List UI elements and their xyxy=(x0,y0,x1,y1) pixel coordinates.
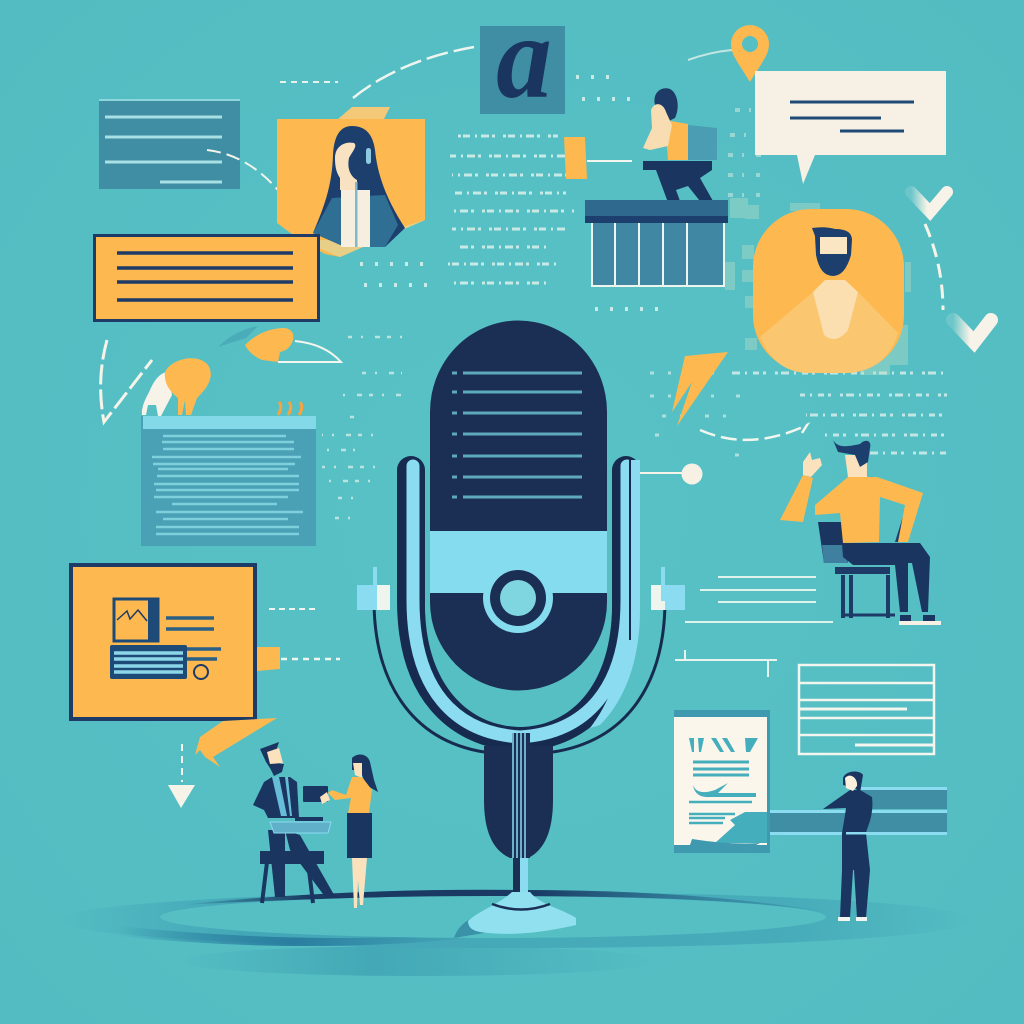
mic: outer thin arcs xyxy=(374,600,665,752)
yellow blob and arc xyxy=(218,326,341,362)
arc to pin xyxy=(688,50,732,60)
arrow: dashed down xyxy=(168,744,195,808)
document illustration xyxy=(674,710,770,853)
faint text texture: upper centre xyxy=(448,136,574,283)
faint text texture: upper right xyxy=(728,110,770,195)
floor shadow ellipse xyxy=(59,890,975,976)
lightning shape xyxy=(672,352,728,426)
figure: standing person on phone xyxy=(823,772,872,921)
check mark lower xyxy=(953,320,991,342)
mic: head body xyxy=(430,320,607,532)
note connector xyxy=(587,160,632,162)
small orange note xyxy=(564,137,587,179)
mic: right clamp xyxy=(651,567,685,610)
panel: browser text block xyxy=(141,402,316,546)
mic: cradle light band xyxy=(413,466,627,737)
mic: left clamp xyxy=(357,567,390,610)
dashed arc right xyxy=(700,425,807,440)
mic: grille lines xyxy=(463,373,582,497)
figure: woman with long hair xyxy=(313,126,405,247)
microphone xyxy=(357,320,685,934)
connector from chart card xyxy=(257,609,340,671)
figure: person seated on building xyxy=(643,88,722,220)
figure: standing businesswoman xyxy=(303,755,378,908)
building / columns xyxy=(585,200,728,287)
dashed tick line xyxy=(675,650,777,677)
faint text texture: left of microphone xyxy=(322,337,412,518)
mic: stem xyxy=(484,746,553,858)
speech bubble top right xyxy=(755,71,946,184)
dashed curve between checks xyxy=(925,224,943,310)
mic: centre dial xyxy=(483,563,553,633)
figure: man seated with raised hand xyxy=(780,440,941,625)
panel: woman portrait xyxy=(277,107,425,257)
mic: base xyxy=(468,892,576,934)
icon: letter tile xyxy=(480,0,565,123)
dot rows left of upper text xyxy=(360,77,668,309)
faint text texture: sparse marks right of mic xyxy=(650,373,745,455)
faint text texture: right of microphone xyxy=(730,373,947,453)
bird-like figure left xyxy=(142,358,211,416)
panel: man portrait rounded xyxy=(753,209,904,373)
panel: orange text card xyxy=(94,236,318,320)
check mark top xyxy=(911,192,947,212)
mic: head inner fill to hide cradle overlap xyxy=(425,470,612,727)
speckled patches behind man portrait xyxy=(725,198,911,375)
arrow: dashed curve from card to portrait xyxy=(207,150,282,195)
dot connector xyxy=(640,464,702,484)
figure: bearded head xyxy=(812,227,852,276)
figure: seated businessman xyxy=(253,742,340,903)
text lines right of mic xyxy=(685,577,833,622)
icon: location pin xyxy=(731,25,769,82)
arc: dashed curve to letter tile xyxy=(353,47,474,98)
panel: outlined text card bottom right xyxy=(799,665,934,754)
steam squiggles xyxy=(278,402,302,415)
mic: cradle dark band xyxy=(411,470,626,738)
dashed curve left xyxy=(101,340,152,422)
orange ribbon arrow xyxy=(195,718,277,767)
panel: teal band xyxy=(770,787,947,835)
panel: orange chart card xyxy=(71,565,255,719)
panel: top-left text card xyxy=(99,99,240,189)
